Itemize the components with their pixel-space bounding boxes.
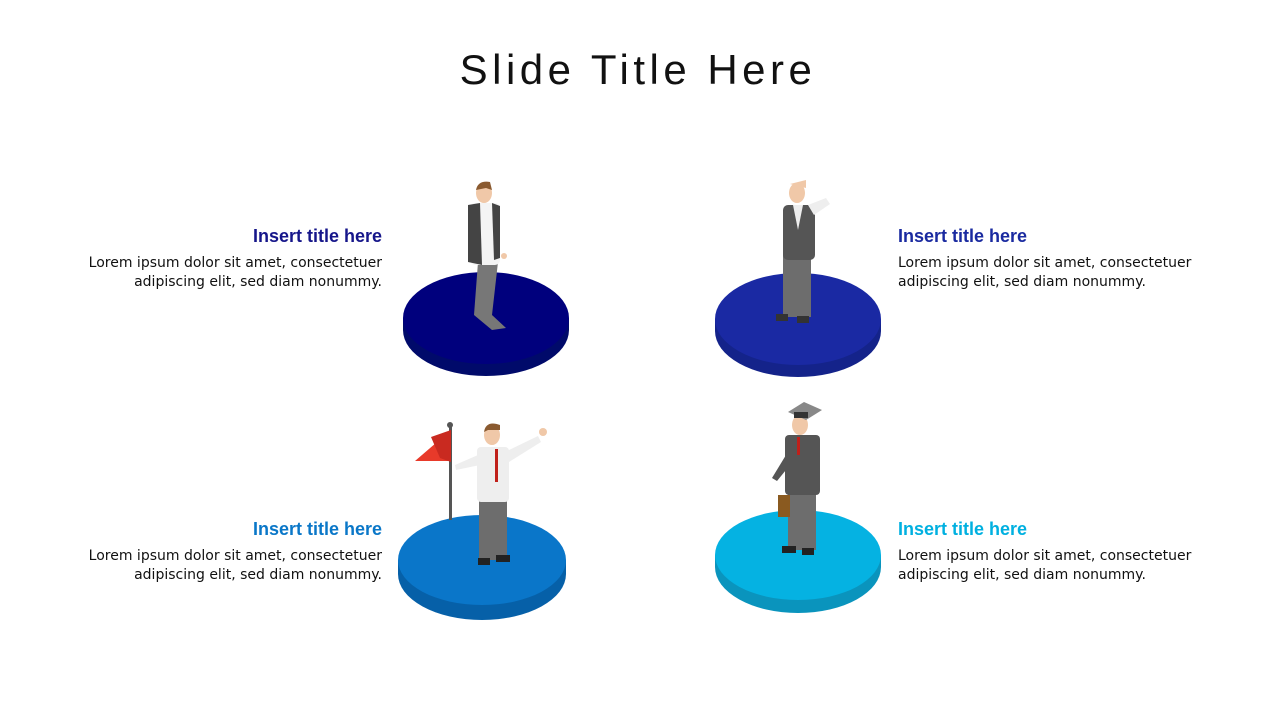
person: walking man top left — [468, 182, 507, 330]
text block: bottom left — [89, 519, 382, 583]
text block: top left: Insert title here — [253, 226, 382, 246]
text block: top left: adipiscing elit, sed diam nonummy. — [134, 274, 382, 290]
text block: bottom left: Lorem ipsum dolor sit amet, consectetuer — [89, 548, 382, 564]
platform: bottom left — [398, 515, 566, 620]
person: thinking man top right — [776, 180, 830, 323]
person: graduate with briefcase bottom right — [772, 402, 822, 555]
text block: bottom right: adipiscing elit, sed diam nonummy. — [898, 567, 1146, 583]
text block: top right: adipiscing elit, sed diam nonummy. — [898, 274, 1146, 290]
person: man with flag bottom left — [415, 422, 547, 565]
platform: bottom right — [715, 510, 881, 613]
platform: top left — [403, 272, 569, 376]
text block: top right: Lorem ipsum dolor sit amet, consectetuer — [898, 255, 1191, 271]
text block: top right: Insert title here — [898, 226, 1027, 246]
title: Slide Title Here — [460, 46, 816, 93]
text block: bottom right — [898, 519, 1192, 583]
text block: bottom left: adipiscing elit, sed diam nonummy. — [134, 567, 382, 583]
text block: bottom left: Insert title here — [253, 519, 382, 539]
text block: bottom right: Lorem ipsum dolor sit amet, consectetuer — [898, 548, 1191, 564]
text block: top right — [898, 226, 1192, 290]
text block: top left: Lorem ipsum dolor sit amet, consectetuer — [89, 255, 382, 271]
platform: top right — [715, 273, 881, 377]
text block: bottom right: Insert title here — [898, 519, 1027, 539]
text block: top left — [89, 226, 382, 290]
